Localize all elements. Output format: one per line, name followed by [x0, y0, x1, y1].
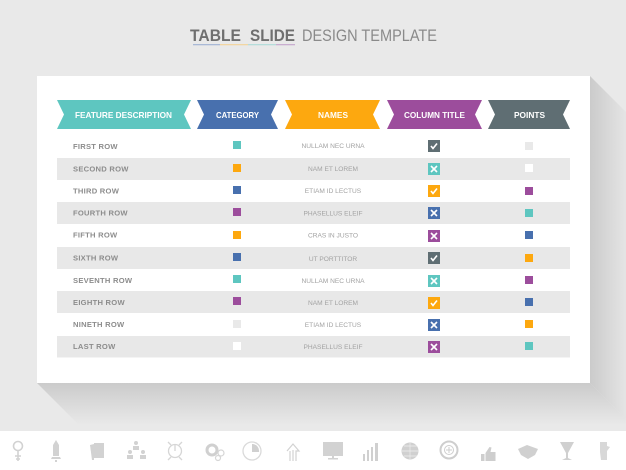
- icon: cocktail glass: [560, 442, 574, 460]
- row 6: UT PORTTITOR: [309, 256, 357, 263]
- row 7: NULLAM NEC URNA: [301, 278, 365, 285]
- header: feature description: FEATURE DESCRIPTION: [75, 111, 172, 120]
- title: [190, 27, 437, 45]
- icon: thumbs up: [481, 447, 496, 461]
- row 4: FOURTH ROW: [73, 208, 128, 218]
- icon: cards: [90, 443, 104, 460]
- icon: monitor: [323, 442, 343, 460]
- row 9: ETIAM ID LECTUS: [305, 322, 362, 329]
- row 9: [73, 319, 533, 331]
- header ribbons: [57, 100, 570, 129]
- row 1: [73, 140, 533, 152]
- row 2: SECOND ROW: [73, 164, 129, 174]
- row 5: FIFTH ROW: [73, 230, 118, 240]
- title: DESIGN TEMPLATE: [302, 27, 437, 45]
- icon: up arrow: [287, 444, 299, 461]
- row 3: THIRD ROW: [73, 186, 120, 196]
- row 3: [73, 185, 533, 197]
- icon: key: [14, 442, 22, 461]
- header: category: [197, 100, 278, 129]
- row 8: EIGHTH ROW: [73, 298, 125, 307]
- row 8: NAM ET LOREM: [308, 300, 358, 307]
- row 8: [57, 291, 570, 313]
- icon: bar growth: [363, 443, 378, 461]
- row 2: [57, 158, 570, 180]
- header: names: [285, 100, 380, 129]
- row 10: [57, 336, 570, 358]
- row 5: CRAS IN JUSTO: [308, 232, 358, 240]
- card shadow: [37, 76, 626, 425]
- title: SLIDE: [250, 27, 295, 45]
- table rows: [57, 140, 570, 358]
- row 1: FIRST ROW: [73, 142, 118, 151]
- row 1: NULLAM NEC URNA: [301, 143, 365, 150]
- icon: rocket: [51, 440, 61, 462]
- icon: gears: [207, 445, 224, 460]
- row 10: PHASELLUS ELEIF: [303, 344, 363, 351]
- row 4: [57, 202, 570, 224]
- icon: target: [440, 442, 458, 458]
- header: feature description: [57, 100, 191, 129]
- header: points: POINTS: [514, 111, 546, 120]
- icon: stopwatch: [168, 442, 182, 460]
- icon strip: [0, 431, 626, 470]
- white table card: [37, 76, 590, 383]
- row 6: [57, 247, 570, 269]
- icon: hand: [600, 442, 610, 460]
- header: names: NAMES: [318, 111, 349, 120]
- row 7: SEVENTH ROW: [73, 276, 133, 285]
- header: points: [488, 100, 570, 129]
- row 3: ETIAM ID LECTUS: [305, 188, 362, 195]
- row 6: SIXTH ROW: [73, 254, 119, 262]
- header: column title: COLUMN TITLE: [404, 111, 466, 120]
- row 9: NINETH ROW: [73, 320, 125, 329]
- icon: pie chart: [243, 442, 261, 460]
- header: category: CATEGORY: [216, 111, 259, 120]
- row 7: [73, 275, 533, 287]
- row 5: [73, 230, 533, 242]
- row 2: NAM ET LOREM: [308, 166, 358, 173]
- header: column title: [387, 100, 482, 129]
- icon: globe: [402, 442, 419, 460]
- row 4: PHASELLUS ELEIF: [303, 210, 363, 218]
- title: TABLE: [190, 27, 241, 45]
- row 10: LAST ROW: [73, 342, 116, 351]
- icon: handshake: [518, 445, 538, 459]
- icon: team: [127, 441, 146, 459]
